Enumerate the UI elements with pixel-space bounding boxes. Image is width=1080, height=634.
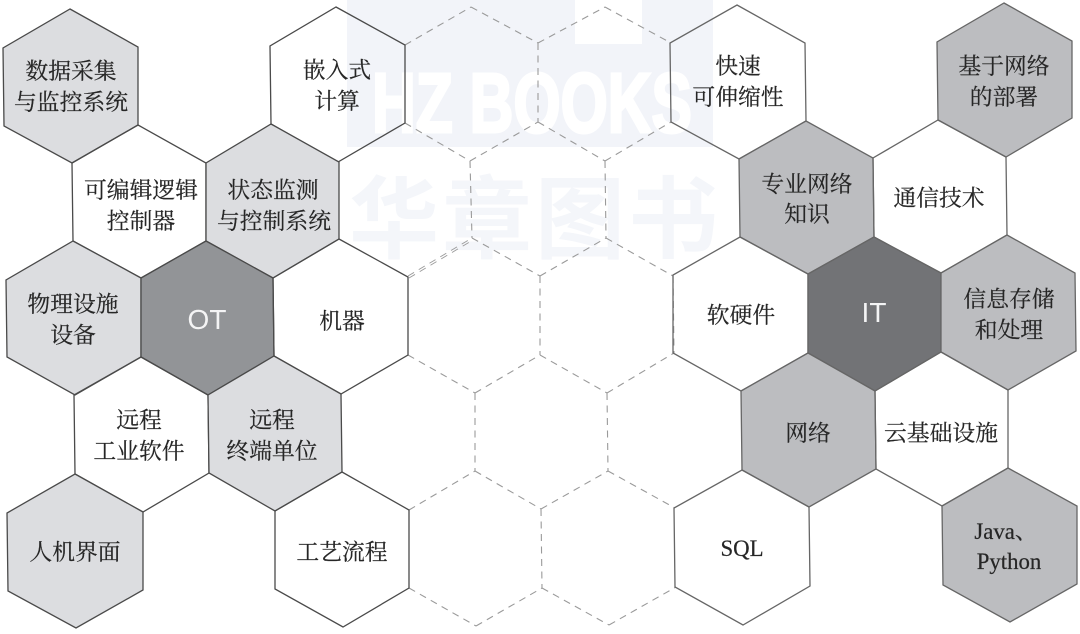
hexagon: 嵌入式计算: 嵌入式 (303, 58, 371, 83)
hexagon: 状态监测与控制系统 (206, 124, 339, 278)
hexagon: 工艺流程 (275, 472, 409, 627)
hexagon: 快速可伸缩性: 可伸缩性 (692, 85, 784, 110)
hexagon: 远程工业软件: 工业软件 (93, 439, 185, 464)
watermark: HZ BOOKS 华章图书: 华章图书 (349, 171, 721, 271)
hexagon: SQL (674, 470, 810, 625)
hexagon: 嵌入式计算 (270, 7, 405, 162)
hexagon: 数据采集与监控系统: 与监控系统 (14, 90, 128, 115)
hexagon: Java、Python: Python (977, 549, 1042, 574)
hexagon: 状态监测与控制系统: 与控制系统 (217, 209, 331, 234)
hexagon: 嵌入式计算: 计算 (314, 89, 360, 114)
hexagon: 人机界面: 人机界面 (29, 540, 121, 565)
hexagon: 机器: 机器 (319, 309, 365, 334)
hexagon: 云基础设施 (875, 352, 1008, 506)
hexagon: IT: IT (862, 297, 886, 328)
dashed empty hexagon grid (405, 7, 676, 626)
hexagon: 专业网络知识 (739, 121, 874, 274)
hexagon: Java、Python (942, 468, 1077, 622)
hexagon: 物理设施设备 (6, 241, 141, 395)
watermark: HZ BOOKS 华章图书 (347, 0, 721, 271)
hexagon: 可编辑逻辑控制器 (72, 125, 206, 278)
hexagon: 网络: 网络 (785, 421, 831, 446)
hexagon: 可编辑逻辑控制器: 控制器 (107, 209, 175, 234)
hexagon: Java、Python: Java、 (974, 519, 1038, 544)
hexagon: IT (808, 237, 941, 391)
hexagon: 软硬件 (673, 237, 808, 391)
hexagon: 远程终端单位 (208, 356, 342, 511)
hexagon: 信息存储和处理: 信息存储 (963, 287, 1055, 312)
hexagon: 远程工业软件 (74, 357, 209, 512)
hexagon: 软硬件: 软硬件 (707, 303, 775, 328)
hexagon: 远程终端单位: 远程 (249, 408, 295, 433)
hexagon: 工艺流程: 工艺流程 (296, 540, 388, 565)
hexagon: 物理设施设备: 物理设施 (27, 292, 119, 317)
IT cluster (670, 3, 1077, 625)
hexagon: 基于网络的部署: 基于网络 (958, 54, 1050, 79)
hexagon: 远程终端单位: 终端单位 (226, 439, 318, 464)
hexagon: 物理设施设备: 设备 (50, 323, 96, 348)
hexagon: 云基础设施: 云基础设施 (884, 421, 998, 446)
hexagon: 可编辑逻辑控制器: 可编辑逻辑 (84, 178, 198, 203)
hexagon: 状态监测与控制系统: 状态监测 (227, 178, 319, 203)
hexagon: 专业网络知识: 专业网络 (761, 172, 853, 197)
hexagon: 远程工业软件: 远程 (116, 408, 162, 433)
hexagon: 快速可伸缩性: 快速 (715, 54, 761, 79)
hexagon: 数据采集与监控系统 (3, 9, 138, 163)
hexagon: 网络 (741, 353, 876, 507)
hexagon: 信息存储和处理: 和处理 (975, 318, 1043, 343)
hexagon: 信息存储和处理 (941, 235, 1076, 390)
hexagon: 数据采集与监控系统: 数据采集 (25, 59, 117, 84)
hexagon: OT (141, 241, 274, 395)
hexagon: 人机界面 (7, 474, 143, 628)
hexagon: 通信技术: 通信技术 (893, 186, 985, 211)
hexagon: 快速可伸缩性 (670, 5, 806, 159)
OT cluster (3, 7, 409, 628)
hexagon: 基于网络的部署: 的部署 (970, 85, 1038, 110)
hexagon: SQL: SQL (720, 536, 764, 561)
hexagon: 基于网络的部署 (937, 3, 1072, 157)
watermark: HZ BOOKS 华章图书: HZ BOOKS (372, 56, 692, 150)
hexagon: OT: OT (188, 304, 226, 335)
hexagon: 专业网络知识: 知识 (784, 202, 831, 227)
hexagon: 通信技术 (873, 120, 1007, 273)
hexagon: 机器 (273, 239, 408, 394)
